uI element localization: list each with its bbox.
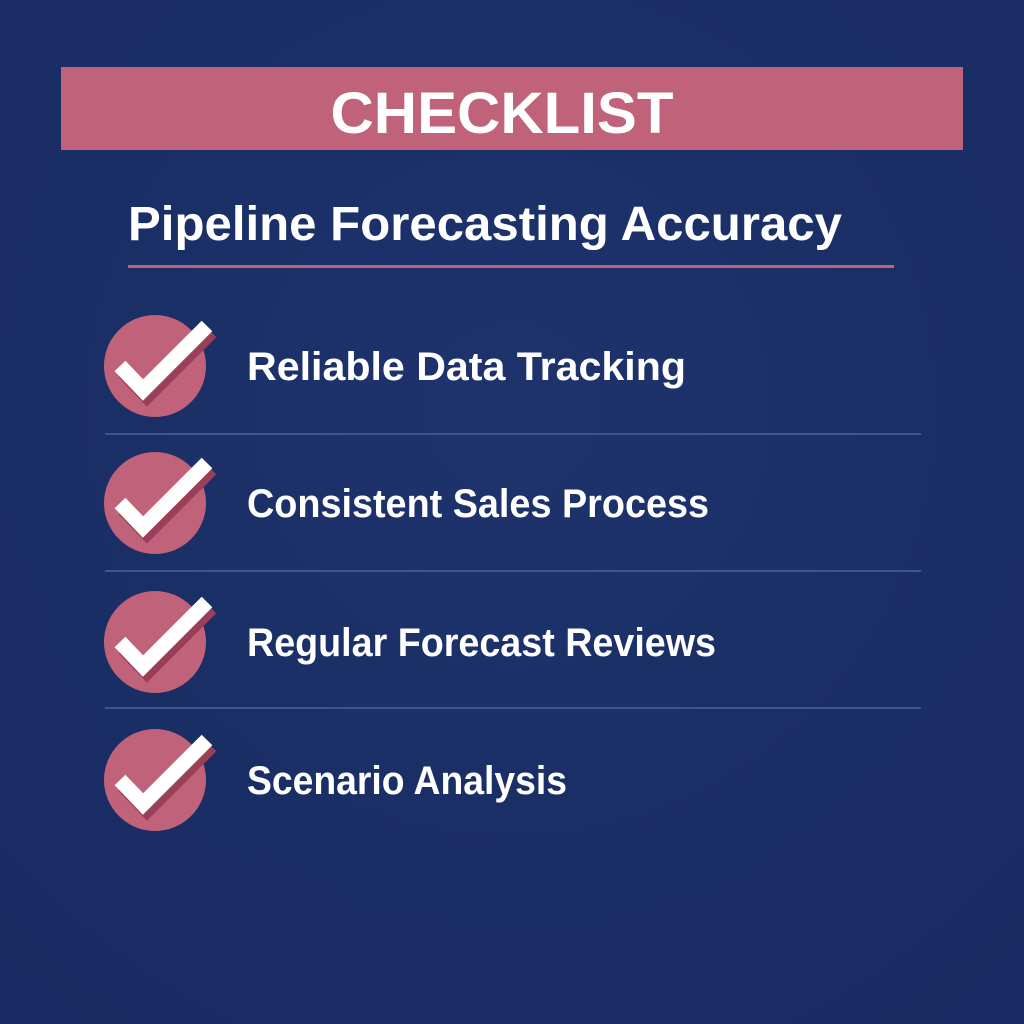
item 3: Regular Forecast Reviews <box>247 621 716 665</box>
item 1 <box>104 315 686 417</box>
banner: checklist: CHECKLIST <box>330 81 674 146</box>
banner: checklist <box>61 67 963 150</box>
item 1: Reliable Data Tracking <box>247 345 686 389</box>
item 3 <box>104 591 716 693</box>
item 4: Scenario Analysis <box>247 759 567 803</box>
item 2: Consistent Sales Process <box>247 482 709 526</box>
title: Pipeline Forecasting Accuracy <box>128 198 842 251</box>
item 2 <box>104 452 709 554</box>
title <box>128 198 894 268</box>
item 4 <box>104 729 567 831</box>
